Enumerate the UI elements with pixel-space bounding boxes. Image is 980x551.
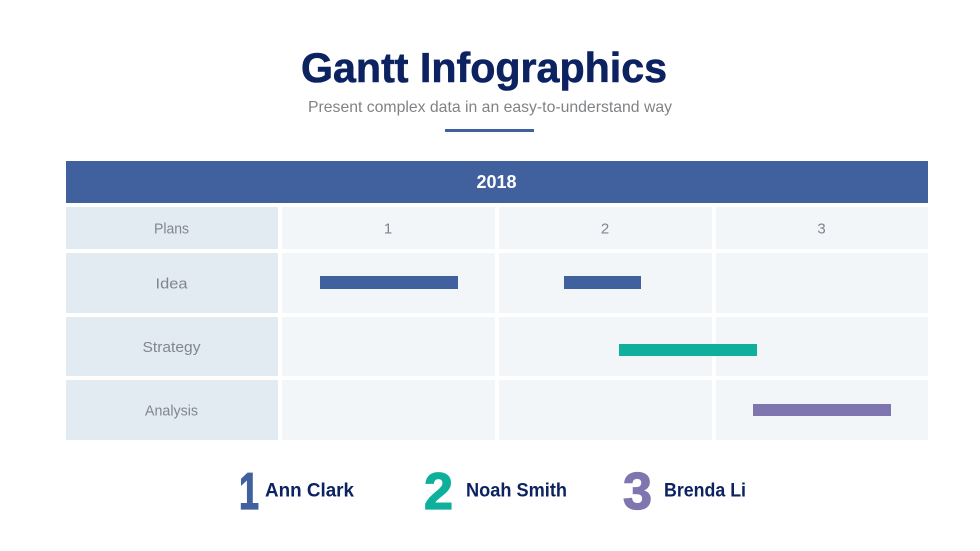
row: strategy xyxy=(66,317,928,376)
row: idea: Idea xyxy=(156,276,188,292)
row: plans header: 1 xyxy=(384,220,392,238)
legend: Ann Clark: 1 xyxy=(239,463,259,521)
year header: 2018 xyxy=(476,172,517,192)
row: plans header: 3 xyxy=(817,220,826,238)
panel: gantt table xyxy=(66,161,928,440)
legend: Ann Clark xyxy=(239,463,354,521)
row: plans header xyxy=(66,207,928,249)
legend: Noah Smith: Noah Smith xyxy=(466,480,567,502)
year header xyxy=(66,161,928,203)
legend: Brenda Li: Brenda Li xyxy=(664,480,746,502)
row: plans header: Plans xyxy=(154,220,189,238)
row: idea xyxy=(66,253,928,313)
legend: Brenda Li xyxy=(623,463,746,521)
legend: Ann Clark: Ann Clark xyxy=(265,480,354,502)
row: analysis xyxy=(66,380,928,440)
legend: Noah Smith xyxy=(424,463,567,521)
row: analysis: Analysis xyxy=(145,402,198,420)
row: strategy: Strategy xyxy=(142,339,201,356)
title: Gantt Infographics xyxy=(301,44,667,91)
legend: Noah Smith: 2 xyxy=(424,463,453,521)
legend: Brenda Li: 3 xyxy=(623,463,652,521)
subtitle: Present complex data in an easy-to-understand way xyxy=(308,99,672,116)
title underline xyxy=(445,129,534,132)
row: plans header: 2 xyxy=(601,220,609,238)
